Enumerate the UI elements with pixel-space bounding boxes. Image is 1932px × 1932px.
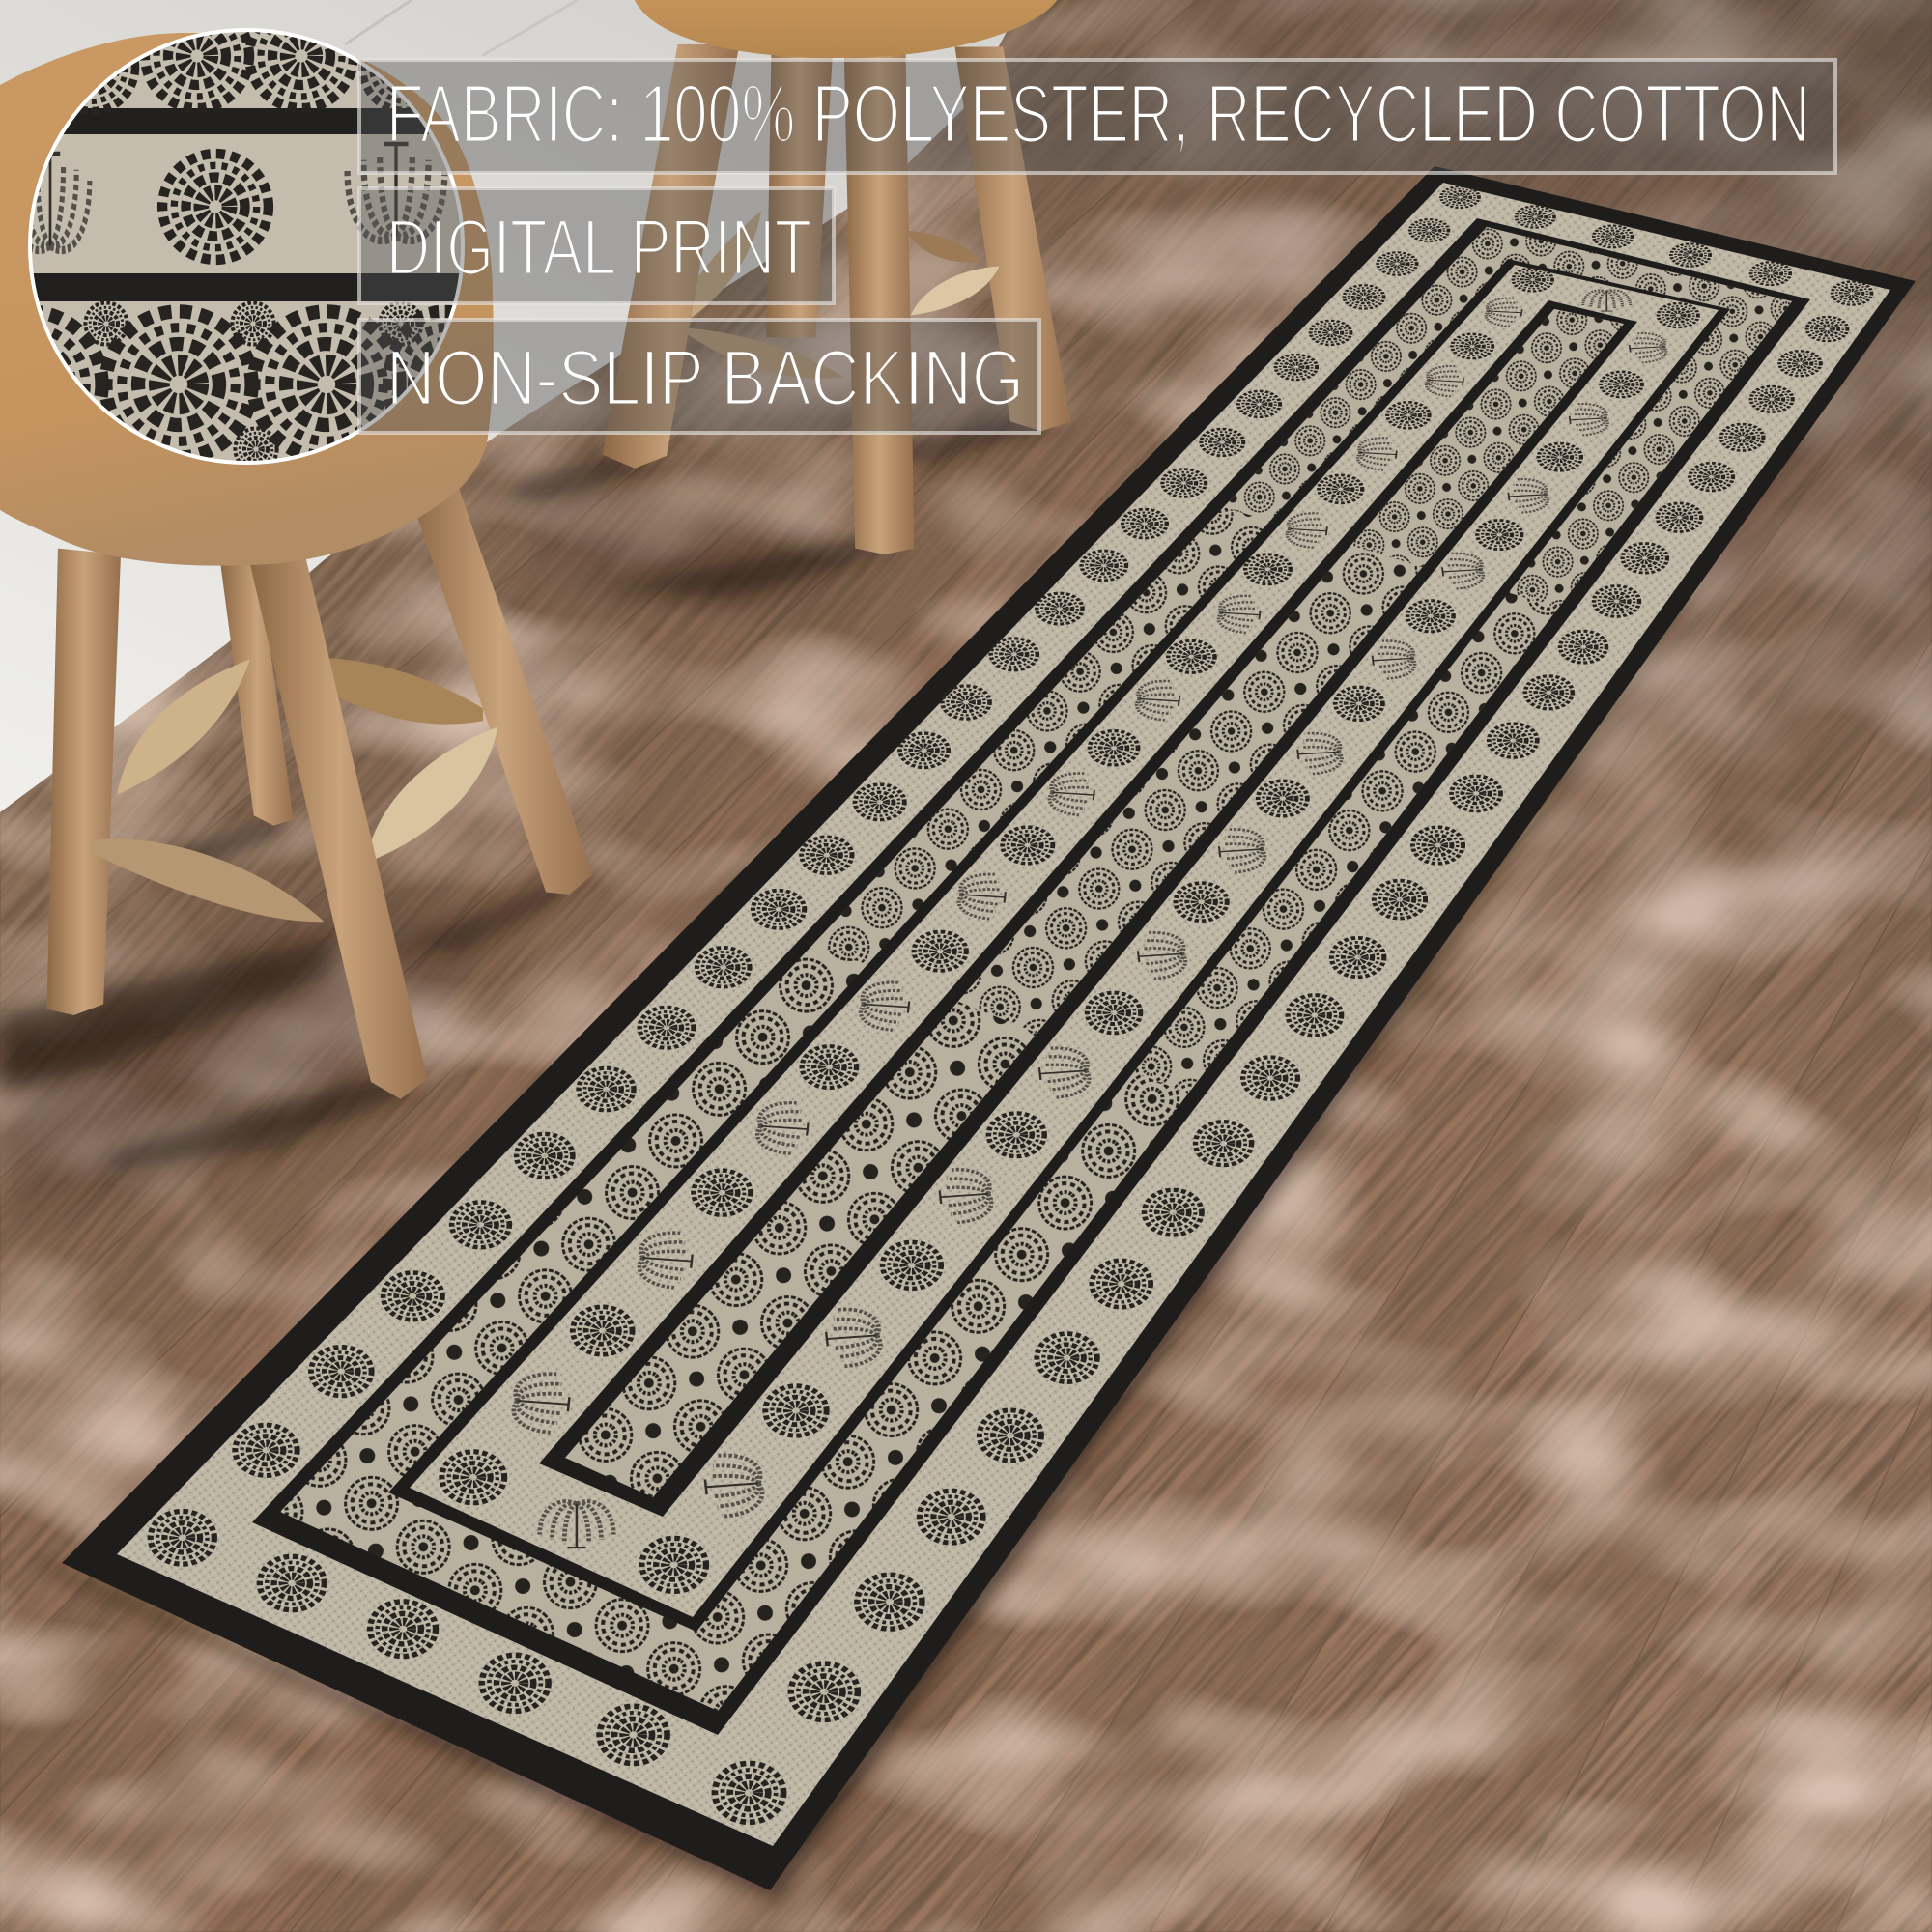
inner cream field: [410, 265, 1719, 1617]
inner strip medallions: [441, 269, 1698, 1591]
willow tree motifs: [512, 290, 1667, 1548]
close-up cream weave: [24, 24, 469, 469]
central lace panel: [565, 309, 1624, 1497]
callout circle: rug close-up: [28, 28, 465, 465]
close-up upper lace medallions: [82, 32, 411, 108]
close-up white ring: [30, 30, 463, 463]
close-up black bands: [24, 108, 469, 301]
label panel: non-slip backing: [359, 320, 1039, 433]
label panel: digital print: [359, 188, 834, 303]
label panel: digital print: DIGITAL PRINT: [386, 204, 811, 292]
back stool seat: [635, 0, 1057, 58]
close-up willow motifs: [11, 144, 444, 250]
back stool legs and rungs: [603, 44, 1070, 554]
front stool seat: [0, 33, 494, 566]
floor shadows: [0, 415, 1063, 1244]
stool front left: [46, 487, 593, 1099]
inner black band: [388, 259, 1730, 1632]
close-up central medallion: [162, 154, 269, 260]
wall: [0, 0, 1024, 812]
lace pattern border: [280, 227, 1792, 1711]
outer cream field: [117, 183, 1890, 1846]
black band around lace border: [252, 218, 1810, 1735]
label panel: non-slip backing: NON-SLIP BACKING: [386, 334, 1024, 422]
central black band: [539, 300, 1637, 1517]
stool back right: [603, 0, 1070, 554]
close-up lower lace medallions: [41, 301, 452, 461]
outer ring medallions: [151, 186, 1872, 1822]
front stool legs and rungs: [46, 487, 593, 1099]
